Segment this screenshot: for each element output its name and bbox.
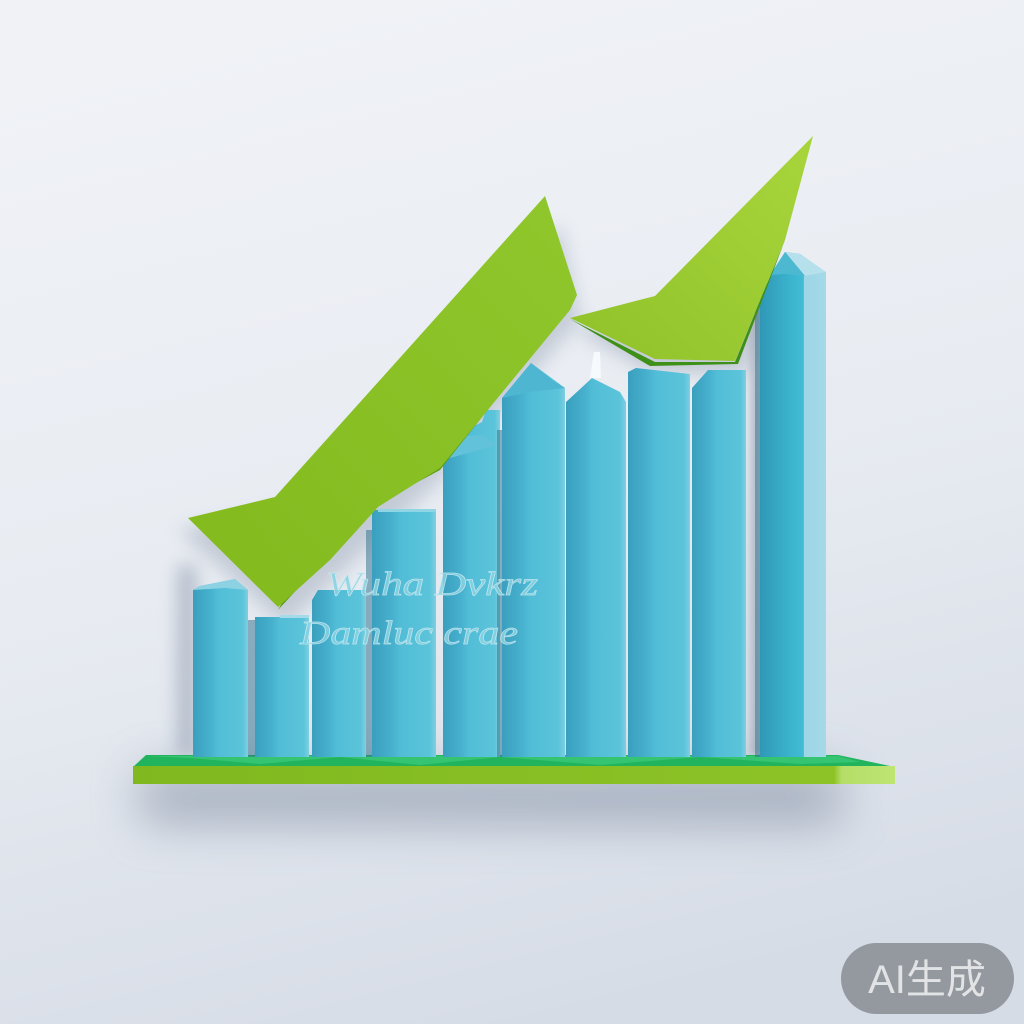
- bar 1: [193, 579, 248, 757]
- label line 1: Wuha Dvkrz: [326, 566, 538, 603]
- bar 5: [443, 410, 500, 757]
- bar 3: [312, 590, 366, 757]
- bar side gaps: [248, 300, 760, 757]
- embossed label text: [299, 566, 538, 652]
- bar 7: [566, 352, 626, 757]
- plate top surface: [133, 755, 895, 767]
- bar 9: [692, 370, 746, 757]
- bars: [193, 252, 826, 757]
- plate front face: [133, 766, 895, 784]
- bar 6: [502, 363, 565, 757]
- base plate: [133, 755, 895, 784]
- badge: AI generated: [841, 943, 1014, 1014]
- bar 4: [372, 509, 436, 757]
- badge: AI generated: AI生成: [868, 958, 986, 1002]
- arrow 1: [188, 196, 577, 610]
- bar 2: [255, 615, 309, 757]
- bar 8: [628, 368, 690, 757]
- bar 10: [760, 252, 826, 757]
- label line 2: Damluc crae: [299, 615, 518, 652]
- soft shadows: [140, 225, 840, 822]
- arrow 2: [570, 136, 813, 366]
